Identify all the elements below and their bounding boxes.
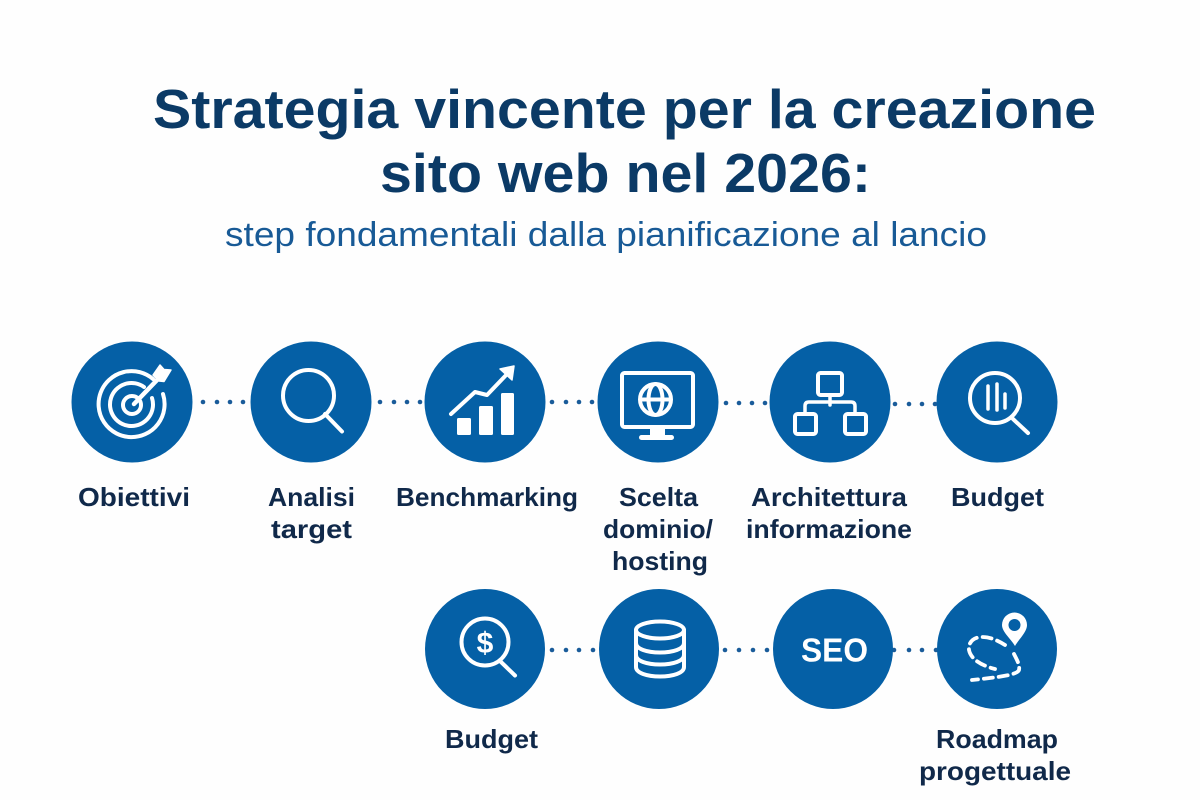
step: SEO (773, 589, 893, 709)
subtitle: step fondamentali dalla pianificazione al lancio (225, 216, 987, 254)
connector dots: row 2 (550, 648, 938, 652)
step: Roadmap progettuale: progettuale (919, 756, 1071, 786)
step: Benchmarking (396, 342, 578, 512)
icon: magnifier with dollar: $ (477, 627, 494, 660)
icon: monitor with globe (622, 373, 693, 440)
icon: target with arrow (99, 365, 171, 437)
title: Strategia vincente per la creazione (153, 78, 1096, 140)
step: Scelta dominio/hosting: hosting (612, 546, 708, 576)
step: database (599, 589, 719, 709)
step: Roadmap progettuale: Roadmap (936, 724, 1058, 754)
icon: magnifier with bars (970, 373, 1028, 433)
title: sito web nel 2026: (380, 142, 871, 204)
step: Benchmarking: Benchmarking (396, 482, 578, 512)
step: Budget (row 2) (425, 589, 545, 754)
icon: growth chart (451, 366, 514, 435)
step: Architettura informazione: Architettura (751, 482, 908, 512)
step: Obiettivi (72, 342, 192, 512)
icon: map pin and dashed route (969, 612, 1027, 680)
step: Budget (row 1): Budget (951, 482, 1044, 512)
title (153, 78, 1096, 204)
step: Architettura informazione (746, 342, 912, 544)
step: Budget (row 2): Budget (445, 724, 538, 754)
step: Budget (row 1) (936, 342, 1058, 512)
icon: magnifier (283, 370, 342, 432)
step: Analisi target (250, 342, 372, 544)
step: Analisi target: target (271, 514, 352, 544)
step: Scelta dominio/hosting (598, 342, 718, 576)
step: Architettura informazione: informazione (746, 514, 912, 544)
step: Scelta dominio/hosting: Scelta (619, 482, 699, 512)
step: Scelta dominio/hosting: dominio/ (603, 514, 713, 544)
icon: site hierarchy (795, 373, 866, 434)
step: Obiettivi: Obiettivi (78, 482, 190, 512)
icon: database (636, 622, 684, 676)
connector dots: row 1 (201, 400, 937, 406)
icon: magnifier with dollar (462, 618, 515, 676)
step: Analisi target: Analisi (268, 482, 355, 512)
step: Roadmap progettuale (919, 589, 1071, 786)
icon: SEO text: SEO (801, 632, 868, 668)
